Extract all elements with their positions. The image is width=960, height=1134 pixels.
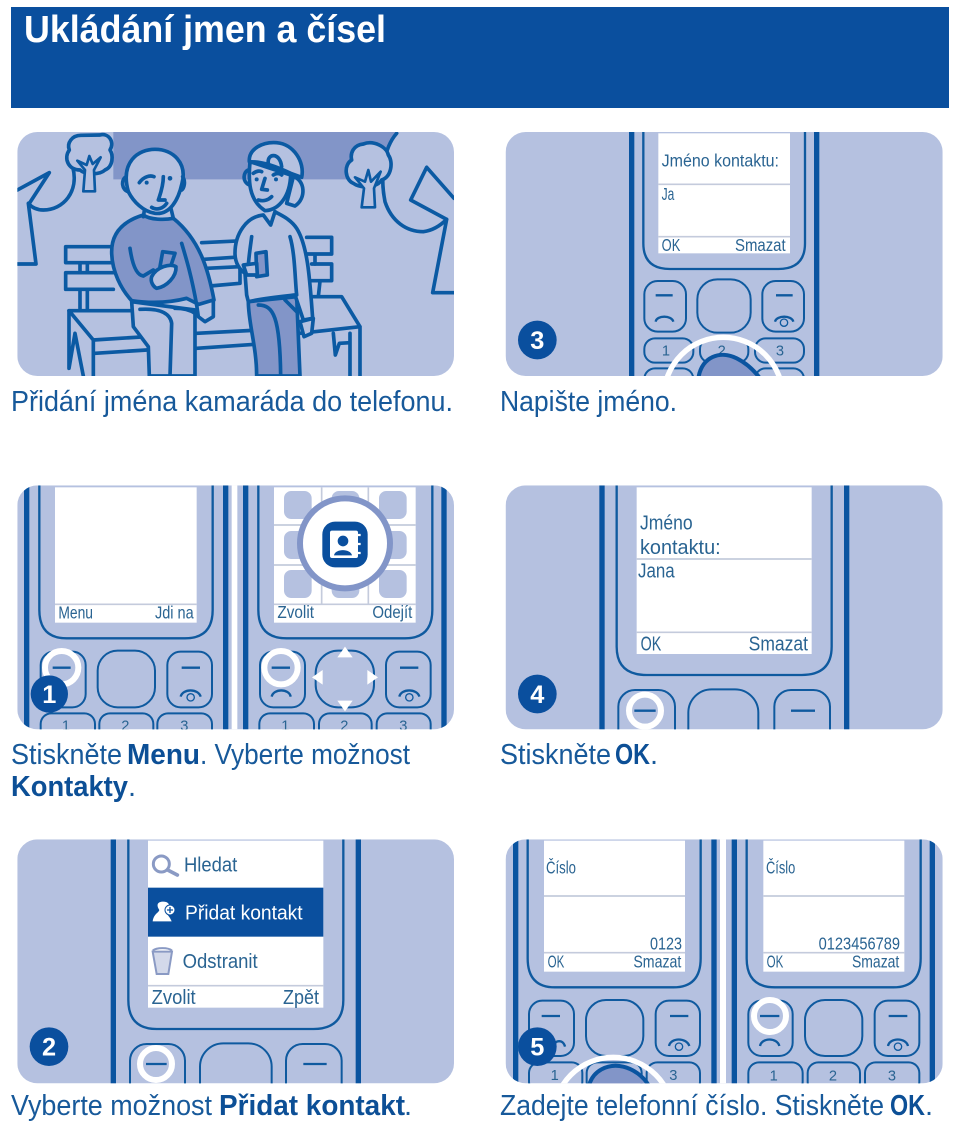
phone screen [658, 133, 790, 255]
caption: step 1: . [128, 771, 136, 803]
keypad [643, 278, 805, 376]
press highlight: select key [140, 1048, 172, 1080]
phone screen: home [55, 487, 197, 623]
step badge 3 [518, 321, 557, 359]
caption: step 1: Kontakty [11, 771, 128, 803]
caption: intro: Přidání jména kamaráda do telefonu. [11, 386, 453, 418]
panel: step 1 [17, 485, 454, 740]
phone screen: Jana [638, 560, 675, 582]
keypad: right phone: 2 [829, 1069, 837, 1085]
bench [66, 237, 360, 376]
phone screen: full number: 0123456789 [819, 933, 900, 953]
phone screen: partial number: OK [548, 951, 565, 971]
title: Ukládání jmen a čísel [24, 9, 386, 51]
icon: add contact [153, 902, 175, 921]
icon: navigation arrows [312, 647, 378, 711]
phone screen: Jméno kontaktu: [662, 151, 779, 171]
caption: step 1 [11, 739, 410, 803]
step badge 4: 4 [530, 681, 544, 709]
step badge 3: 3 [530, 327, 544, 355]
phone screen: full number: Číslo [766, 857, 795, 877]
phone screen: menu grid: Zvolit [277, 602, 314, 622]
keypad: 2 [718, 343, 726, 359]
phone screen: partial number: Číslo [546, 857, 576, 877]
keypad: left phone: 3 [669, 1068, 677, 1084]
panel: friends on a bench [17, 132, 454, 376]
phone screen: contact menu: Odstranit [183, 951, 258, 973]
phone screen: home: Jdi na [155, 603, 194, 623]
icon: trash [153, 948, 172, 974]
phone screen: full number: OK [767, 951, 784, 971]
phone screen: menu grid [274, 487, 416, 623]
caption: step 1: . Vyberte možnost [200, 739, 410, 771]
step badge 2: 2 [42, 1034, 56, 1062]
phone screen: menu grid: Odejít [372, 602, 412, 622]
keypad [129, 1042, 343, 1084]
keypad: right phone: 1 [281, 719, 289, 735]
keypad: right phone: 1 [770, 1069, 778, 1085]
man [112, 149, 214, 376]
keypad: right phone [259, 651, 431, 740]
keypad: right phone: 3 [399, 719, 407, 735]
phone screen: full number: Smazat [852, 951, 899, 971]
phone screen: Smazat [749, 634, 808, 656]
phone screen: partial number: 0123 [650, 933, 682, 953]
phone screen: full number [763, 841, 904, 972]
keypad: left phone: 3 [180, 719, 188, 735]
caption: step 4: OK [615, 739, 650, 771]
phone screen: partial number: Smazat [633, 951, 681, 971]
step badge 1 [31, 675, 68, 713]
finger press [665, 334, 782, 376]
keypad: 3 [776, 343, 784, 359]
caption: step 5: OK [890, 1090, 925, 1122]
caption: step 2: . [404, 1090, 412, 1122]
panel: step 3 [506, 132, 942, 376]
keypad: left phone: 2 [121, 719, 129, 735]
icon: left tree [17, 135, 112, 264]
keypad: right phone [748, 1000, 919, 1092]
keypad: left phone: 1 [551, 1068, 559, 1084]
panel: step 5 [506, 839, 942, 1084]
caption: step 2 [11, 1090, 412, 1122]
caption: step 2: Vyberte možnost [11, 1090, 212, 1122]
phone screen: home: Menu [58, 603, 93, 623]
panel: step 2 [17, 839, 454, 1111]
caption: step 1: Stiskněte [11, 739, 122, 771]
icon: contacts [300, 498, 390, 588]
phone screen: OK [662, 235, 681, 255]
phone screen: OK [641, 634, 662, 656]
keypad: right phone: 2 [340, 719, 348, 735]
caption: step 5: . [925, 1090, 933, 1122]
step badge 4 [518, 675, 557, 713]
step badge 5: 5 [530, 1034, 544, 1062]
caption: step 4: Stiskněte [500, 739, 611, 771]
header banner [11, 7, 949, 108]
phone screen: contact menu: Přidat kontakt [185, 902, 303, 924]
keypad: 1 [662, 343, 670, 359]
phone screen: partial number [544, 841, 685, 972]
phone screen: kontaktu: [640, 537, 721, 559]
press highlight: Menu key [45, 651, 78, 684]
step badge 1: 1 [42, 681, 56, 709]
icon: right tree [346, 133, 454, 293]
keypad [617, 688, 831, 730]
step badge 5 [518, 1027, 557, 1066]
keypad: left phone [41, 651, 212, 740]
phone screen: Smazat [735, 235, 786, 255]
press highlight: OK key [754, 1000, 786, 1032]
keypad: left phone [529, 1000, 700, 1092]
step badge 2 [30, 1027, 68, 1066]
caption: step 3: Napište jméno. [500, 386, 677, 418]
phone screen: Ja [662, 184, 675, 204]
phone screen [637, 487, 812, 656]
caption: step 1: Menu [127, 739, 200, 771]
caption: step 4: . [650, 739, 658, 771]
keypad: left phone: 1 [62, 719, 70, 735]
finger press [560, 1054, 666, 1084]
press highlight: Menu key right [264, 651, 298, 684]
woman [235, 143, 313, 376]
caption: step 2: Přidat kontakt [219, 1090, 405, 1122]
caption: step 5: Zadejte telefonní číslo. Stiskněte [500, 1090, 884, 1122]
phone screen: contact menu: Zpět [283, 987, 319, 1009]
phone screen: contact menu: Zvolit [152, 987, 196, 1009]
press highlight: OK key [629, 695, 661, 727]
phone screen: Jméno [640, 512, 693, 534]
panel: step 4 [506, 485, 943, 757]
keypad: right phone: 3 [888, 1069, 896, 1085]
phone screen: contact menu [148, 841, 323, 1009]
phone screen: contact menu: Hledat [184, 854, 238, 876]
icon: search [153, 856, 177, 875]
